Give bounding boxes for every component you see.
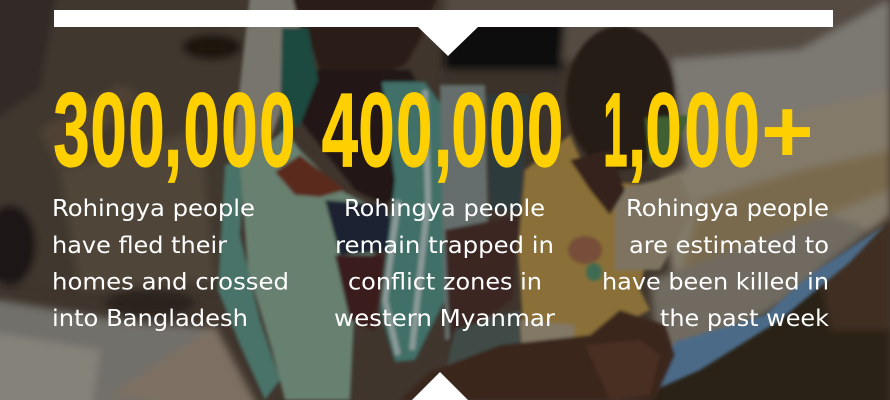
description: fled to Bangladesh: Rohingya people (52, 194, 255, 222)
stat column 1: 300,000 fled (52, 71, 295, 332)
stat column 2: 400,000 trapped (322, 71, 563, 332)
number: 300,000: 300,000 (53, 71, 295, 189)
description: estimated killed: the past week (660, 304, 829, 332)
plus sign: + (761, 82, 814, 182)
description: trapped in conflict zones: Rohingya people (344, 194, 545, 222)
description: fled to Bangladesh: into Bangladesh (52, 304, 248, 332)
description: fled to Bangladesh (52, 194, 289, 332)
number: 400,000: 400,000 (322, 71, 563, 189)
description: estimated killed: have been killed in (602, 268, 829, 296)
description: trapped in conflict zones (334, 194, 555, 332)
number: ,000: ,000 (628, 71, 760, 189)
description: trapped in conflict zones: remain trapped in (335, 231, 554, 259)
description: estimated killed: Rohingya people (626, 194, 829, 222)
description: trapped in conflict zones: western Myanmar (334, 304, 555, 332)
description: trapped in conflict zones: conflict zones in (348, 268, 542, 296)
bottom white pointer (412, 372, 468, 400)
stat column 3: 1,000+ killed (602, 71, 829, 332)
description: fled to Bangladesh: homes and crossed (52, 268, 289, 296)
number: digit 1: 1 (603, 72, 628, 189)
description: fled to Bangladesh: have fled their (52, 231, 227, 259)
description: estimated killed: are estimated to (629, 231, 829, 259)
description: estimated killed (602, 194, 829, 332)
top white banner with downward pointer (54, 10, 833, 56)
